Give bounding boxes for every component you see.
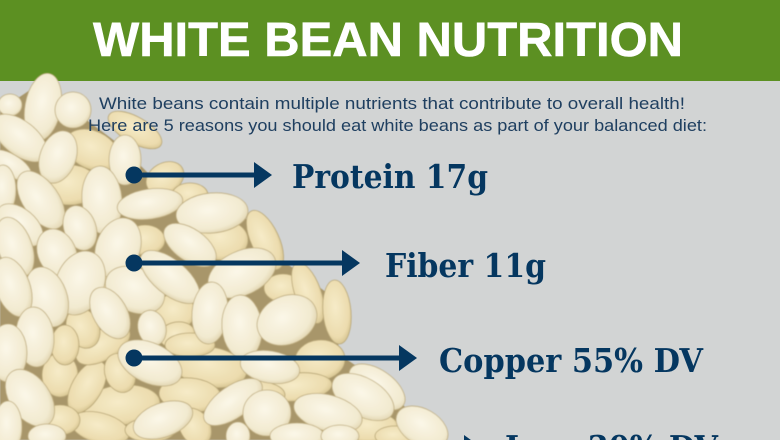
intro text: White beans contain multiple nutrients that contribute to overall health! bbox=[99, 94, 685, 113]
arrow: protein bbox=[126, 162, 272, 188]
intro text bbox=[88, 94, 707, 135]
header banner bbox=[0, 0, 780, 81]
bottom row, cropped by the frame bbox=[464, 434, 718, 440]
title: WHITE BEAN NUTRITION bbox=[93, 14, 683, 67]
intro text: Here are 5 reasons you should eat white beans as part of your balanced diet: bbox=[88, 116, 707, 135]
label: protein: Protein 17g bbox=[292, 157, 488, 196]
label: copper: Copper 55% DV bbox=[439, 341, 704, 380]
label: fiber: Fiber 11g bbox=[385, 246, 546, 285]
white bean pile bbox=[0, 70, 455, 440]
arrow: copper bbox=[126, 345, 417, 371]
arrow: fiber bbox=[126, 250, 360, 276]
arrow: iron bbox=[464, 435, 471, 440]
